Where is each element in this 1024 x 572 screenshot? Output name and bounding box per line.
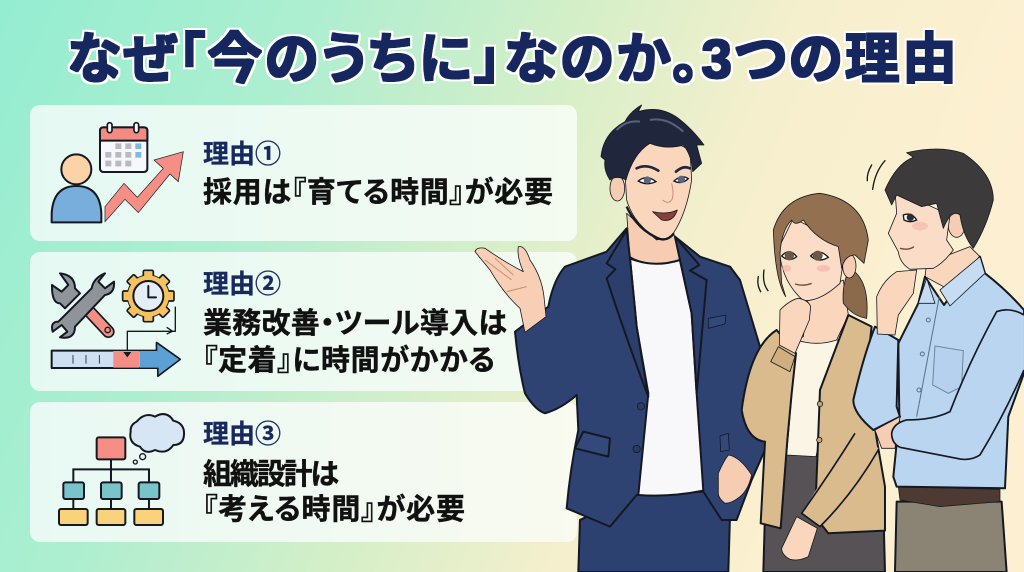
title: なぜ「今のうちに」なのか。3つの理由 bbox=[67, 28, 957, 90]
shirt torso bbox=[893, 257, 1024, 488]
motion lines bbox=[867, 161, 885, 189]
lower hand bbox=[782, 517, 817, 560]
icon: tools, gear clock and timeline arrow bbox=[52, 270, 180, 376]
ponytail bbox=[843, 268, 867, 318]
head bbox=[948, 211, 965, 237]
reason 1 text: 採用は『育てる時間』が必要 bbox=[203, 175, 553, 209]
reason 2 text: 業務改善・ツール導入は bbox=[203, 307, 507, 340]
hand on chin bbox=[779, 298, 811, 353]
icon: org chart with thought bubble bbox=[59, 414, 184, 525]
icon: person with calendar and rising arrow bbox=[52, 123, 183, 222]
panel: reason 2 bbox=[30, 252, 577, 391]
motion lines bbox=[758, 270, 768, 292]
hand on chin bbox=[877, 270, 917, 335]
raised open hand bbox=[475, 246, 546, 332]
panel: reason 2: 『定着』に時間がかかる bbox=[203, 343, 495, 377]
reason 1 label: 理由① bbox=[203, 139, 281, 169]
right hand on hip bbox=[718, 455, 752, 503]
head bbox=[779, 218, 845, 301]
folded arm bbox=[853, 327, 900, 430]
panel: reason 1 bbox=[30, 105, 577, 241]
illustration: thinking man in blue shirt bbox=[853, 149, 1024, 572]
reason 3 label: 理由③ bbox=[203, 419, 281, 449]
illustration: woman in beige cardigan bbox=[742, 193, 885, 572]
reason 3 text: 組織設計は bbox=[203, 458, 339, 491]
illustration: presenter man in navy jacket bbox=[475, 105, 765, 572]
panel: reason 3 bbox=[30, 402, 577, 542]
reason 2 label: 理由② bbox=[203, 269, 281, 299]
head bbox=[610, 176, 625, 201]
panel: reason 3: 『考える時間』が必要 bbox=[203, 492, 465, 526]
